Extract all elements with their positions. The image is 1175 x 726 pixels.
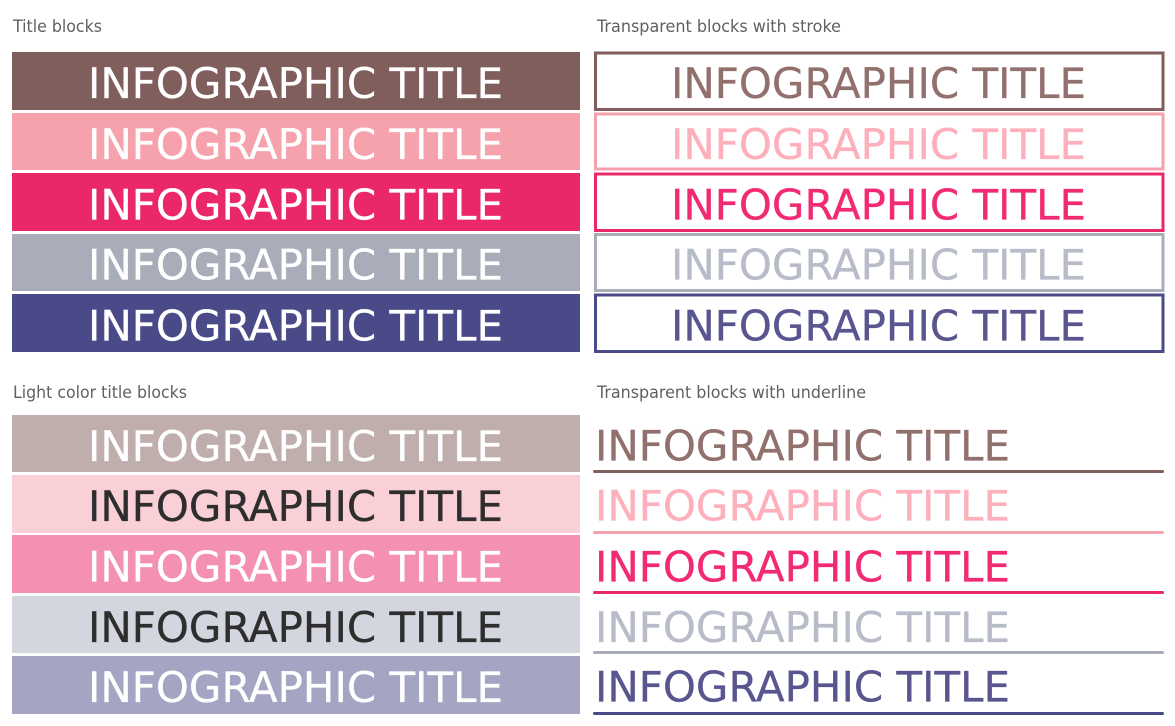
block: brown title [12, 52, 580, 110]
block: pink title [12, 113, 580, 170]
block: light brown title: INFOGRAPHIC TITLE [88, 422, 503, 471]
block: pink stroke title: INFOGRAPHIC TITLE [671, 120, 1086, 169]
block: light magenta title: INFOGRAPHIC TITLE [88, 542, 503, 592]
block: light pink title [12, 475, 580, 533]
block: light brown title [12, 415, 580, 472]
block: magenta underlined title [593, 542, 1164, 594]
block: magenta stroke title [596, 174, 1163, 230]
block: grey stroke title: INFOGRAPHIC TITLE [671, 240, 1086, 290]
block: magenta title: INFOGRAPHIC TITLE [88, 180, 503, 230]
block: indigo underlined title [593, 662, 1164, 715]
block: grey underlined title: INFOGRAPHIC TITLE [595, 603, 1010, 652]
block: brown underlined title [593, 422, 1164, 473]
block: light grey title: INFOGRAPHIC TITLE [88, 603, 503, 652]
heading: transparent blocks with stroke: Transparent blocks with stroke [596, 17, 841, 37]
heading: title blocks: Title blocks [12, 17, 102, 37]
panel: transparent blocks with underline [593, 383, 1164, 715]
panel: light color title blocks [12, 383, 580, 714]
block: grey title [12, 234, 580, 291]
block: pink underlined title [593, 482, 1164, 534]
block: brown stroke title: INFOGRAPHIC TITLE [671, 59, 1086, 108]
block: magenta title [12, 173, 580, 231]
block: magenta underlined title: INFOGRAPHIC TITLE [595, 542, 1010, 592]
block: light grey title [12, 596, 580, 653]
block: indigo underlined title: INFOGRAPHIC TITLE [595, 662, 1010, 712]
block: magenta stroke title: INFOGRAPHIC TITLE [671, 180, 1086, 230]
block: pink underlined title: INFOGRAPHIC TITLE [595, 482, 1010, 530]
block: light magenta title [12, 535, 580, 593]
block: light indigo title: INFOGRAPHIC TITLE [88, 663, 503, 712]
block: brown title: INFOGRAPHIC TITLE [88, 59, 503, 108]
block: indigo stroke title [596, 295, 1163, 352]
heading: light color title blocks: Light color title blocks [13, 383, 187, 403]
panel: title blocks [12, 17, 580, 352]
block: pink stroke title [596, 114, 1163, 169]
block: brown underlined title: INFOGRAPHIC TITLE [595, 422, 1010, 470]
panel: transparent blocks with stroke [596, 17, 1163, 352]
block: indigo title [12, 294, 580, 352]
block: indigo stroke title: INFOGRAPHIC TITLE [671, 302, 1086, 350]
block: brown stroke title [596, 53, 1163, 110]
block: pink title: INFOGRAPHIC TITLE [88, 120, 503, 169]
block: grey stroke title [596, 234, 1163, 290]
block: grey title: INFOGRAPHIC TITLE [88, 240, 503, 290]
block: light indigo title [12, 656, 580, 714]
block: light pink title: INFOGRAPHIC TITLE [88, 482, 503, 531]
heading: transparent blocks with underline: Transparent blocks with underline [596, 383, 866, 403]
block: indigo title: INFOGRAPHIC TITLE [88, 302, 503, 350]
block: grey underlined title [593, 603, 1164, 654]
